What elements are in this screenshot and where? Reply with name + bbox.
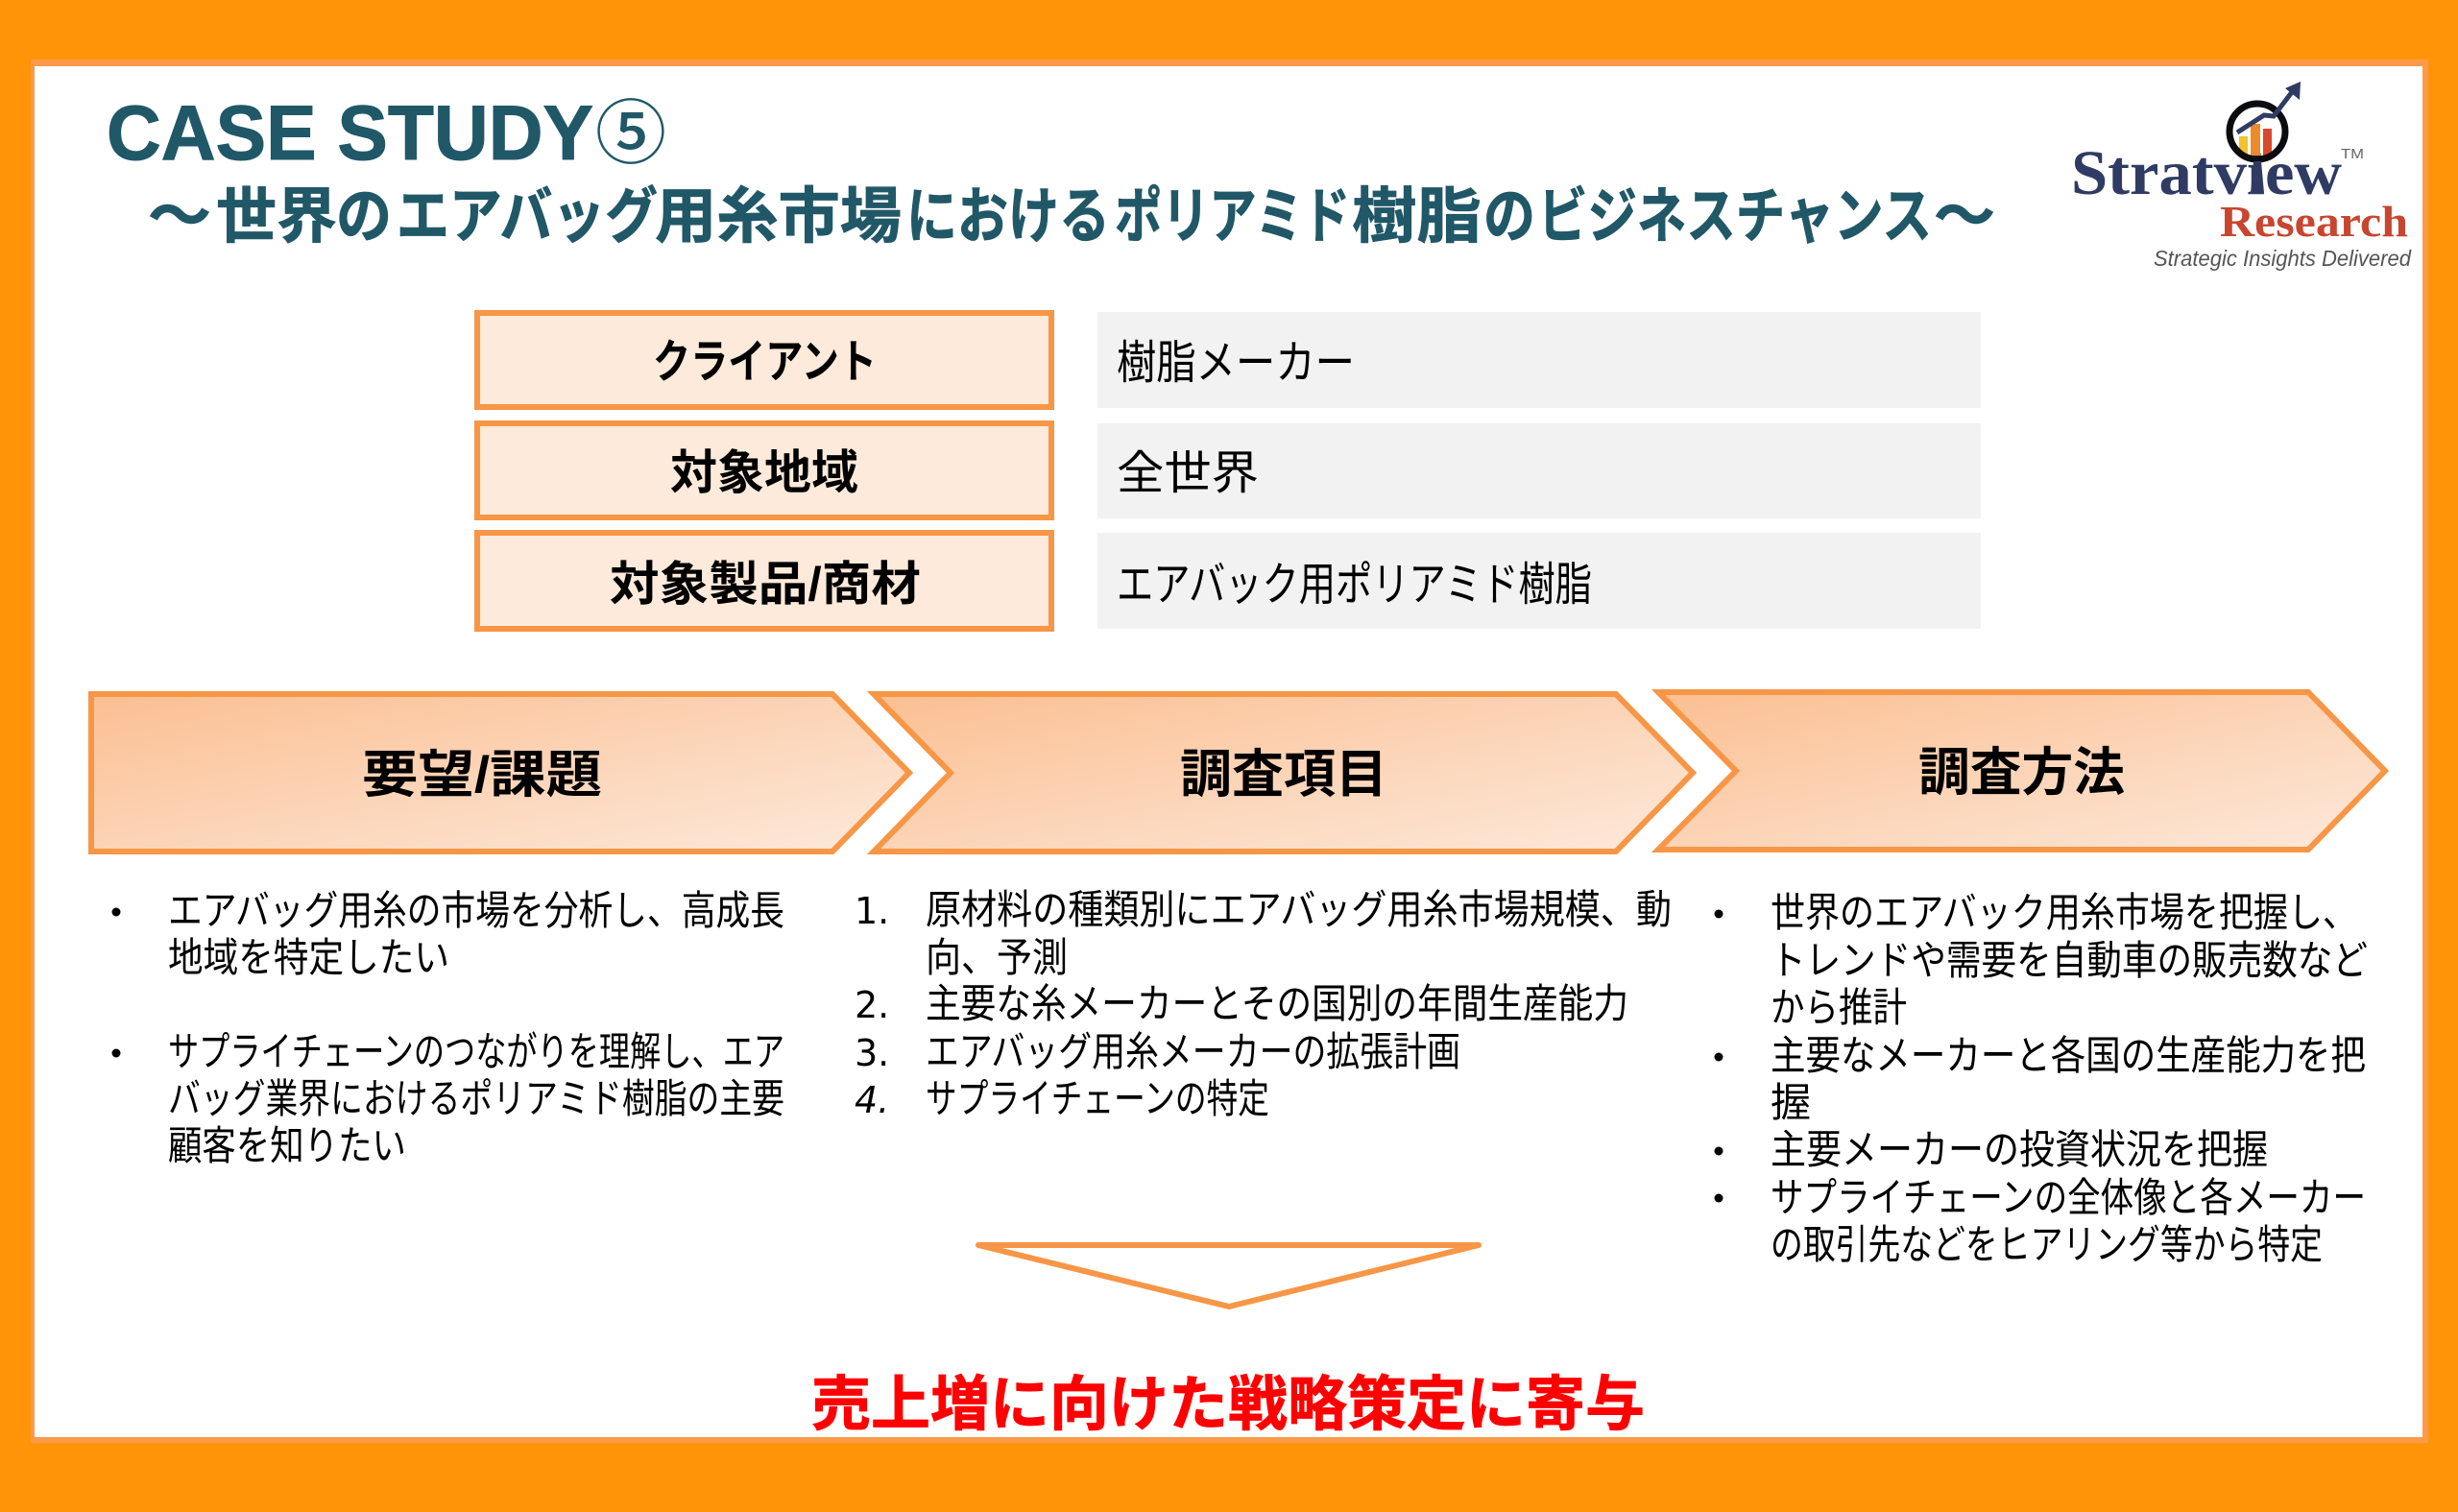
text block: requests list: 顧客を知りたい bbox=[168, 1123, 406, 1168]
subtitle: ビジネスチャンス bbox=[1538, 183, 1932, 251]
row: target product: エアバック用ポリアミド樹脂 bbox=[1117, 560, 1592, 611]
text block: survey items list: 原材料の種類別にエアバッグ用糸市場規模、動 bbox=[926, 887, 1672, 932]
text block: survey items list: 3. bbox=[855, 1032, 889, 1074]
logo wordmark: Stratview bbox=[2071, 138, 2342, 208]
text block: requests list: バッグ業界におけるポリアミド樹脂の主要 bbox=[168, 1076, 784, 1121]
text block: requests list: エアバッグ用糸の市場を分析し、高成長 bbox=[168, 888, 784, 933]
row: target region bbox=[477, 423, 1981, 518]
arrow: survey method bbox=[1658, 692, 2385, 850]
subtitle: の bbox=[1483, 183, 1535, 251]
subtitle: エアバッグ bbox=[397, 183, 658, 251]
row: target product: 対象製品/商材 bbox=[610, 559, 921, 611]
text block: requests list bbox=[111, 888, 784, 1168]
icon: magnifier with bars and arrow bbox=[2229, 82, 2301, 193]
row: target region: 対象地域 bbox=[670, 447, 858, 499]
logo: Stratview Research: TM bbox=[2341, 146, 2364, 162]
row: client: クライアント bbox=[653, 337, 877, 388]
arrow: down triangle bbox=[978, 1245, 1479, 1307]
text block: survey method list: 主要なメーカーと各国の生産能力を把 bbox=[1771, 1033, 2366, 1078]
text block: survey items list: 4. bbox=[855, 1079, 889, 1121]
subtitle: 樹脂 bbox=[1352, 183, 1482, 251]
title: ⑤ bbox=[595, 95, 666, 173]
arrow: survey method: 調査方法 bbox=[1918, 744, 2125, 802]
text block: survey items list: 1. bbox=[855, 890, 889, 932]
subtitle: ～ bbox=[1934, 183, 1995, 251]
text block: survey method list bbox=[1715, 890, 2368, 1267]
row: target product bbox=[477, 533, 1981, 629]
arrow: requests and issues bbox=[91, 694, 909, 852]
text block: survey items list bbox=[855, 887, 1672, 1121]
logo: Stratview Research: Research bbox=[2220, 198, 2408, 246]
text block: survey method list: 握 bbox=[1771, 1080, 1811, 1125]
row: target region: 全世界 bbox=[1117, 448, 1259, 499]
subtitle bbox=[148, 183, 1995, 251]
subtitle: 世界 bbox=[216, 183, 337, 251]
logo: Stratview Research: Strategic Insights Delivered bbox=[2154, 246, 2412, 271]
text block: survey items list: 向、予測 bbox=[926, 935, 1068, 980]
text block: survey method list: から推計 bbox=[1771, 985, 1907, 1030]
arrow: survey items bbox=[874, 694, 1693, 852]
text block: survey method list: の取引先などをヒアリング等から特定 bbox=[1771, 1222, 2323, 1267]
row: client: 樹脂メーカー bbox=[1117, 338, 1355, 389]
text block: survey items list: エアバッグ用糸メーカーの拡張計画 bbox=[926, 1029, 1460, 1074]
panel: info table bbox=[477, 312, 1981, 629]
logo: Stratview Research bbox=[2071, 82, 2412, 271]
arrow: survey items: 調査項目 bbox=[1180, 746, 1387, 804]
text block: survey items list: サプライチェーンの特定 bbox=[926, 1076, 1269, 1121]
callout: conclusion: 売上増に向けた戦略策定に寄与 bbox=[811, 1372, 1645, 1438]
row: client bbox=[477, 312, 1981, 408]
text block: survey items list: 主要な糸メーカーとその国別の年間生産能力 bbox=[926, 981, 1628, 1026]
subtitle: の bbox=[336, 183, 392, 251]
text block: survey method list: トレンドや需要を自動車の販売数など bbox=[1771, 938, 2368, 983]
subtitle: 用糸市場 bbox=[655, 183, 902, 251]
arrow: requests and issues: 要望/課題 bbox=[362, 747, 602, 804]
subtitle: ～ bbox=[148, 183, 211, 251]
text block: survey method list: 世界のエアバック用糸市場を把握し、 bbox=[1771, 890, 2357, 935]
text block: requests list: 地域を特定したい bbox=[168, 935, 449, 980]
text block: survey method list: 主要メーカーの投資状況を把握 bbox=[1771, 1127, 2268, 1172]
title: CASE STUDY bbox=[107, 90, 593, 177]
text block: survey items list: 2. bbox=[855, 984, 889, 1026]
subtitle: ポリアミド bbox=[1115, 183, 1350, 251]
text block: requests list: サプライチェーンのつながりを理解し、エア bbox=[168, 1029, 784, 1074]
subtitle: における bbox=[906, 183, 1110, 251]
